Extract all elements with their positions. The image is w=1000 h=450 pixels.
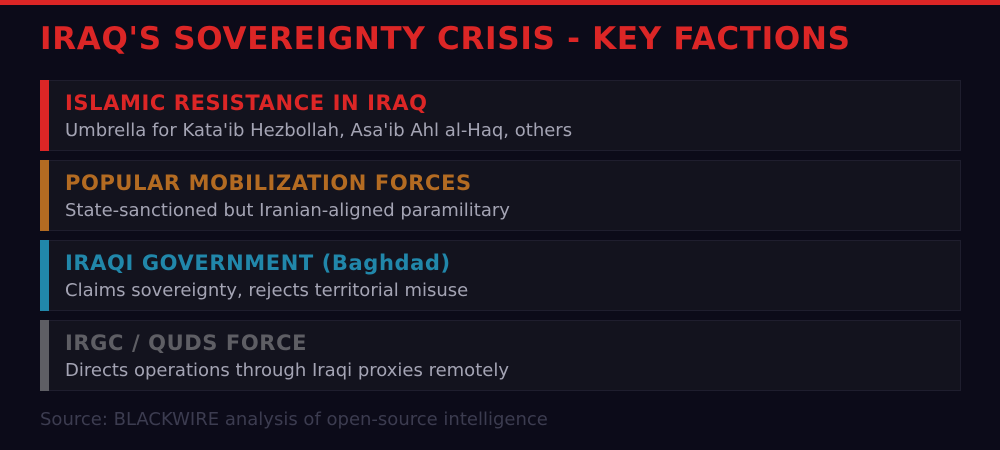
description: Umbrella for Kata'ib Hezbollah, Asa'ib Ahl al-Haq, others [65,120,572,141]
panel: government [40,240,961,311]
title: IRAQ'S SOVEREIGNTY CRISIS - KEY FACTIONS [40,21,851,57]
heading: IRGC / QUDS FORCE [65,331,307,355]
heading: POPULAR MOBILIZATION FORCES [65,171,472,195]
description: Claims sovereignty, rejects territorial misuse [65,280,468,301]
description: State-sanctioned but Iranian-aligned paramilitary [65,200,510,221]
panel: islamic resistance [40,80,961,151]
panel: IRGC [40,320,961,391]
description: Directs operations through Iraqi proxies remotely [65,360,509,381]
heading: IRAQI GOVERNMENT (Baghdad) [65,251,451,275]
source: Source: BLACKWIRE analysis of open-source intelligence [40,409,548,430]
panel: PMF [40,160,961,231]
heading: ISLAMIC RESISTANCE IN IRAQ [65,91,428,115]
